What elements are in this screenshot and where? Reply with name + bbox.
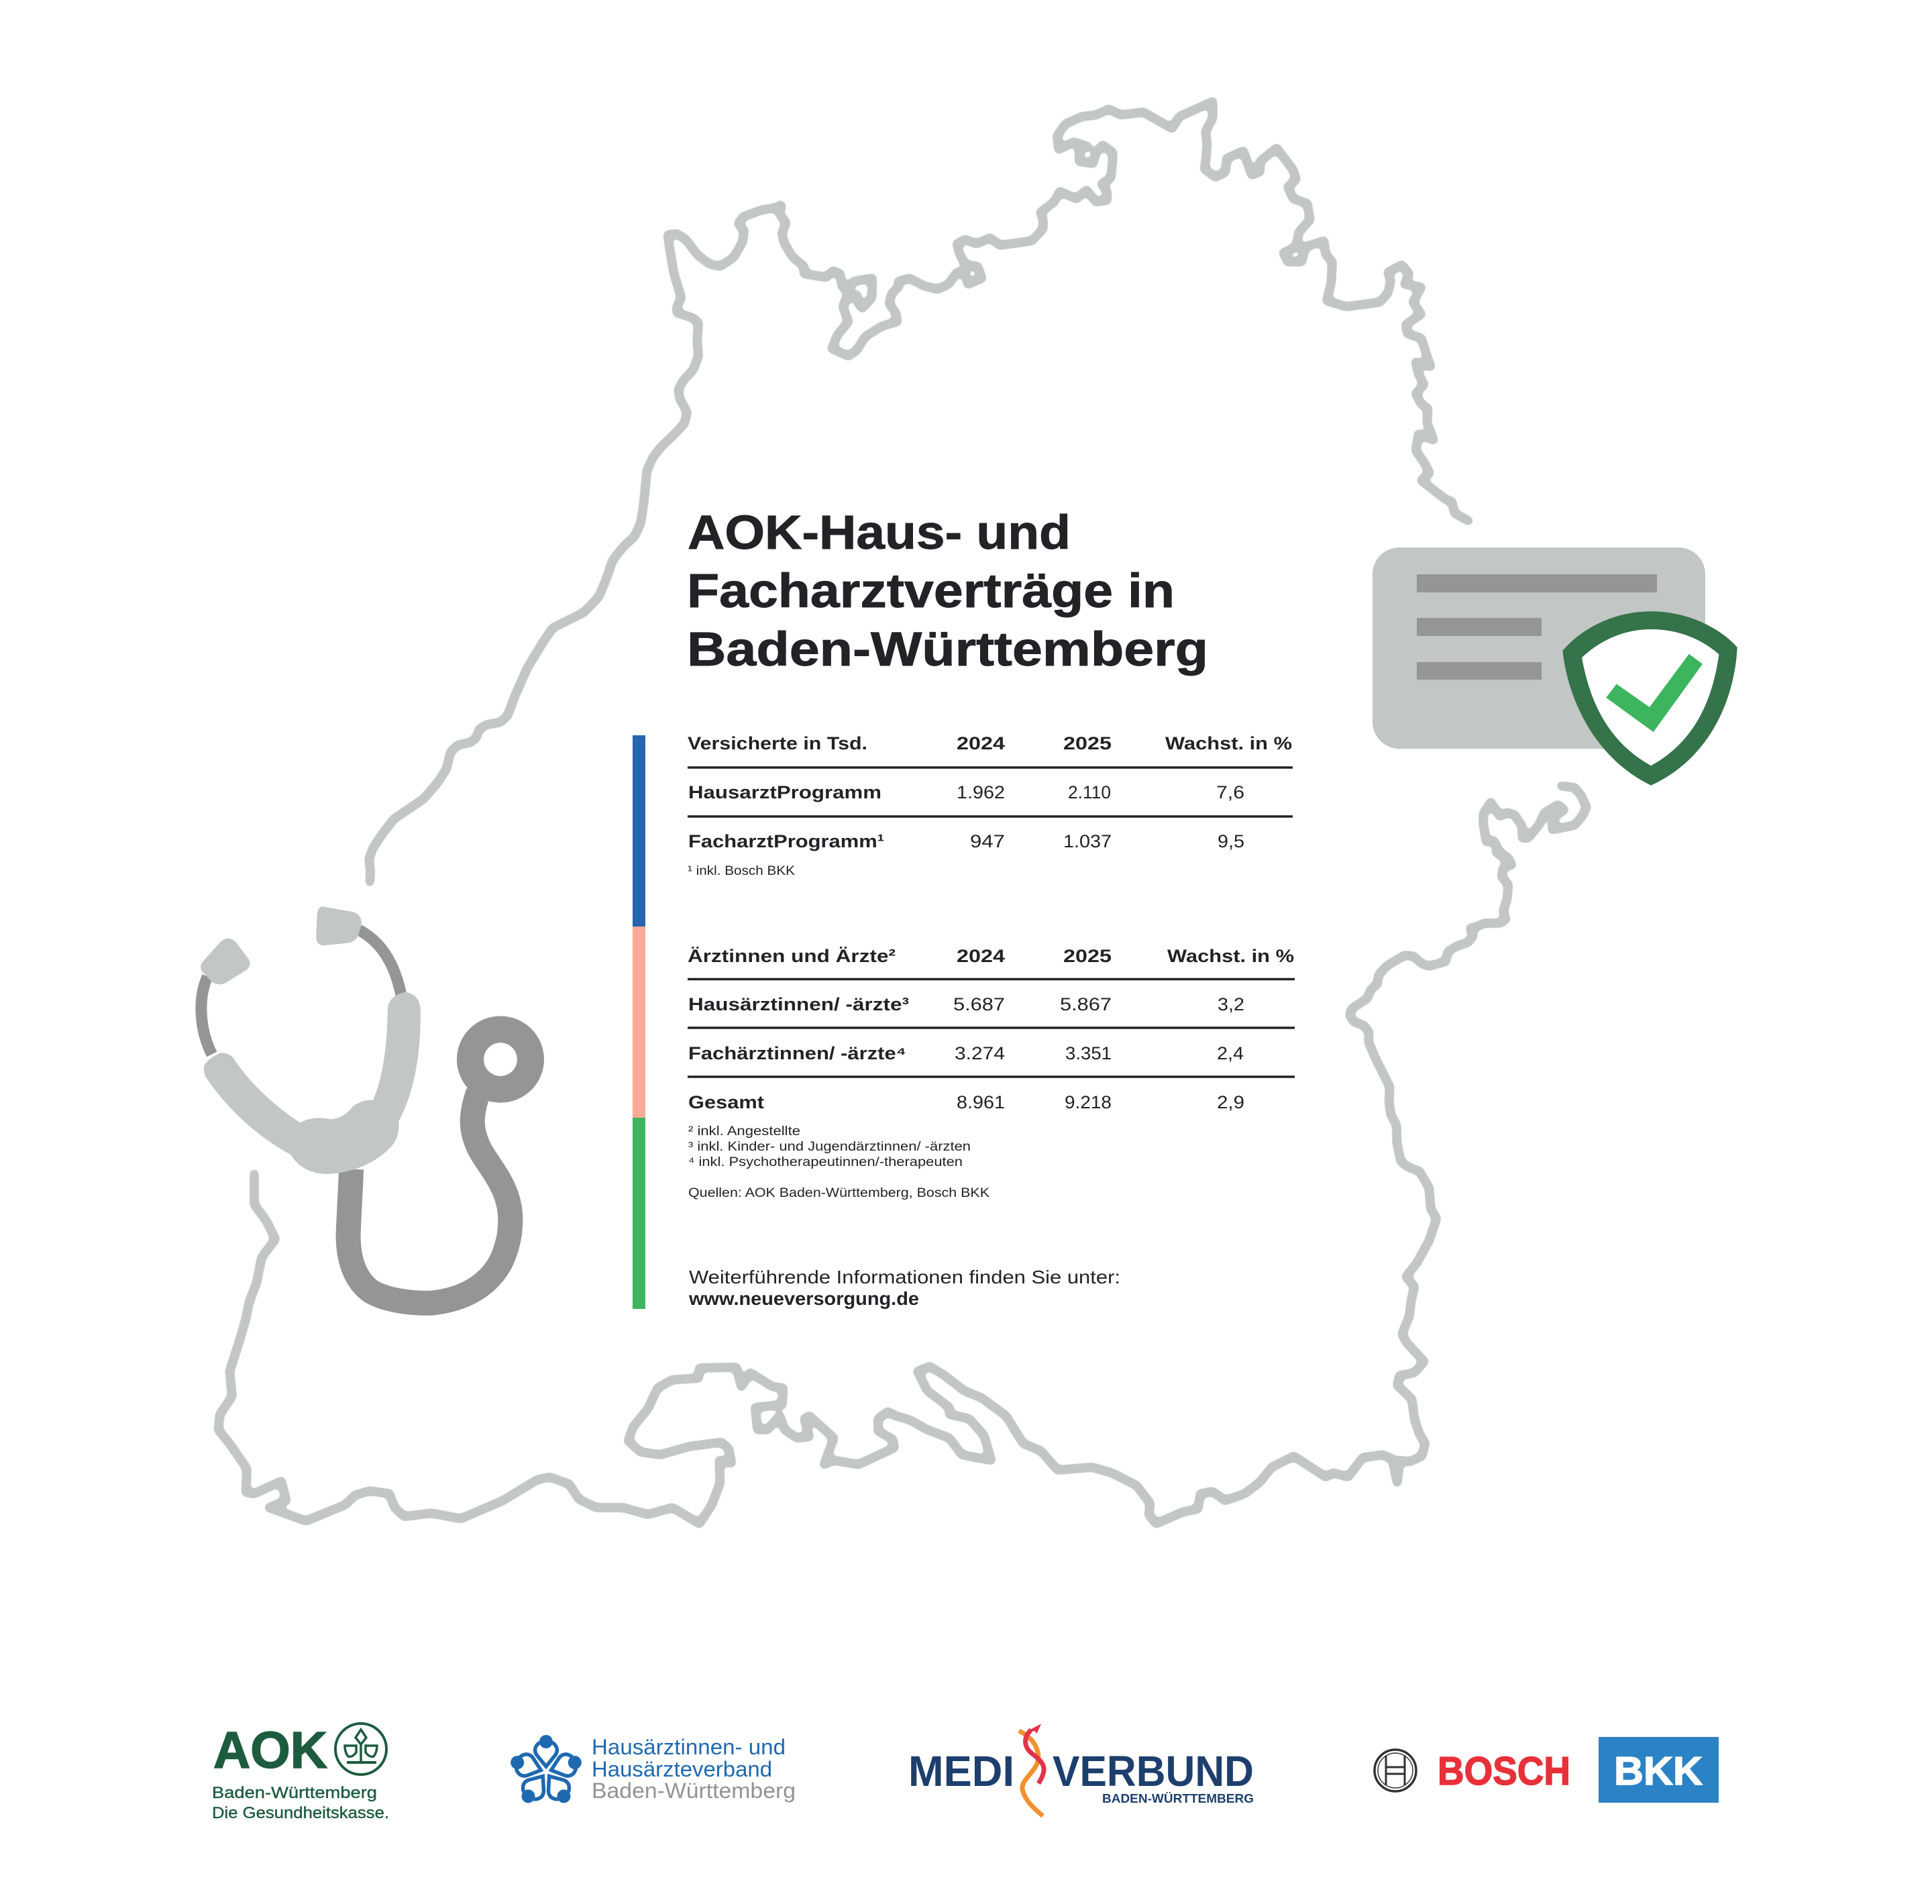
logo: Hausärztinnen- und Hausärzteverband: Hausärztinnen- und xyxy=(592,1735,786,1759)
table: Versicherte: Wachst. in % xyxy=(1165,733,1292,753)
table: Ärztinnen und Ärzte: 3.351 xyxy=(1065,1043,1112,1063)
coloured vertical bar xyxy=(633,735,645,1309)
title: AOK-Haus- und xyxy=(688,507,1071,560)
logo: Bosch BKK: BOSCH xyxy=(1438,1749,1570,1793)
table: Ärztinnen und Ärzte: Hausärztinnen/ -ärzte³ xyxy=(688,994,909,1014)
logo: Hausärztinnen- und Hausärzteverband: Baden-Württemberg xyxy=(592,1779,796,1803)
icon: insurance card with shield xyxy=(1373,547,1737,786)
table: Versicherte: 7,6 xyxy=(1216,782,1244,802)
table: Ärztinnen und Ärzte: Fachärztinnen/ -ärzte⁴ xyxy=(688,1043,906,1063)
logo: MEDI Verbund: MEDI xyxy=(908,1747,1014,1795)
logo: MEDI Verbund: BADEN-WÜRTTEMBERG xyxy=(1102,1792,1254,1805)
map outline: Baden-Württemberg xyxy=(218,101,1587,1524)
table: Versicherte: Versicherte in Tsd. xyxy=(688,733,867,753)
logo: MEDI Verbund: VERBUND xyxy=(1053,1747,1254,1795)
further information link xyxy=(688,1267,1120,1309)
table: Versicherte: 2025 xyxy=(1063,733,1112,753)
table: Ärztinnen und Ärzte: 8.961 xyxy=(957,1092,1005,1112)
table: Versicherte: 2024 xyxy=(957,733,1005,753)
footnotes and sources: ⁴ inkl. Psychotherapeutinnen/-therapeuten xyxy=(688,1155,963,1169)
footnotes and sources: Quellen: AOK Baden-Württemberg, Bosch BKK xyxy=(688,1186,989,1200)
logo: Bosch BKK xyxy=(1375,1737,1719,1803)
footnotes and sources: ² inkl. Angestellte xyxy=(688,1124,800,1139)
table: Versicherte: 1.962 xyxy=(957,782,1005,802)
further information link: Weiterführende Informationen finden Sie unter: xyxy=(689,1267,1120,1287)
footnotes and sources xyxy=(688,1124,989,1200)
table: Ärztinnen und Ärzte: 2025 xyxy=(1063,946,1112,966)
logo: Bosch BKK: BKK xyxy=(1614,1749,1703,1793)
logo: AOK xyxy=(212,1722,389,1822)
table: Versicherte: ¹ inkl. Bosch BKK xyxy=(688,864,795,878)
table: Ärztinnen und Ärzte: 2,4 xyxy=(1217,1043,1244,1063)
table: Versicherte: 9,5 xyxy=(1218,831,1244,851)
table: Ärztinnen und Ärzte xyxy=(688,946,1295,1112)
table: Versicherte: 1.037 xyxy=(1063,831,1112,851)
table: Versicherte xyxy=(688,733,1293,878)
table: Ärztinnen und Ärzte: Ärztinnen und Ärzte² xyxy=(688,946,896,966)
logo: AOK: Baden-Württemberg xyxy=(212,1784,377,1802)
table: Ärztinnen und Ärzte: 5.867 xyxy=(1060,994,1112,1014)
table: Ärztinnen und Ärzte: Wachst. in % xyxy=(1167,946,1294,966)
table: Versicherte: 947 xyxy=(970,831,1005,851)
table: Ärztinnen und Ärzte: 5.687 xyxy=(953,994,1005,1014)
table: Versicherte: FacharztProgramm¹ xyxy=(688,831,884,851)
logo: Hausärztinnen- und Hausärzteverband: Hausärzteverband xyxy=(592,1757,772,1781)
table: Ärztinnen und Ärzte: 3.274 xyxy=(955,1043,1005,1063)
logo: Hausärztinnen- und Hausärzteverband xyxy=(508,1735,796,1808)
title: Facharztverträge in xyxy=(687,565,1175,618)
logo: AOK: AOK xyxy=(213,1722,327,1779)
footnotes and sources: ³ inkl. Kinder- und Jugendärztinnen/ -ärzten xyxy=(688,1140,971,1154)
further information link: www.neueversorgung.de xyxy=(688,1288,919,1309)
logo: MEDI Verbund xyxy=(908,1724,1254,1816)
table: Versicherte: HausarztProgramm xyxy=(688,782,881,802)
table: Ärztinnen und Ärzte: 3,2 xyxy=(1218,994,1244,1014)
icon: stethoscope xyxy=(201,906,544,1303)
table: Ärztinnen und Ärzte: 2,9 xyxy=(1217,1092,1244,1112)
logo: AOK: Die Gesundheitskasse. xyxy=(212,1804,389,1822)
table: Ärztinnen und Ärzte: 9.218 xyxy=(1065,1092,1112,1112)
table: Ärztinnen und Ärzte: 2024 xyxy=(957,946,1005,966)
table: Versicherte: 2.110 xyxy=(1068,782,1111,802)
table: Ärztinnen und Ärzte: Gesamt xyxy=(688,1092,764,1112)
title: Baden-Württemberg xyxy=(687,623,1208,676)
title xyxy=(687,507,1208,676)
